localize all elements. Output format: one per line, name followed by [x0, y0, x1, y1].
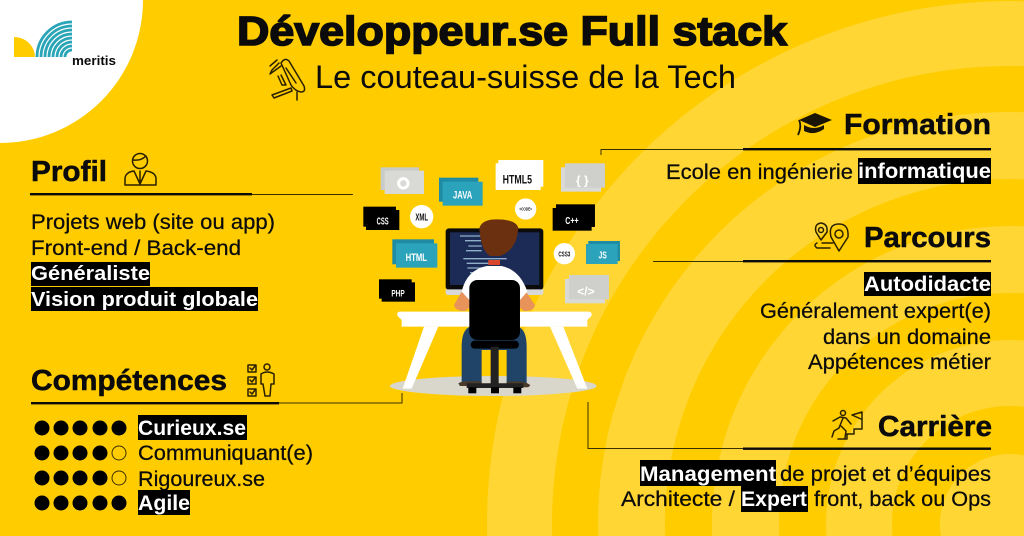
- floor shadow: [390, 376, 597, 396]
- list: parcours: [760, 272, 991, 374]
- list: profil: Vision produit globale: [31, 289, 258, 311]
- list: profil: Front-end / Back-end: [31, 237, 241, 260]
- connector line: [30, 193, 353, 195]
- panel: parcours: [653, 222, 991, 374]
- list: parcours: Appétences métier: [808, 351, 991, 374]
- text: carriere: de projet et d’équipes: [780, 463, 991, 486]
- code cards: CSS: [377, 216, 389, 227]
- list: profil: [31, 211, 275, 311]
- icon: climbing stairs: [832, 410, 862, 439]
- code cards: <CODE>: [519, 207, 532, 212]
- heading: Compétences: Compétences: [31, 365, 227, 397]
- list: parcours: dans un domaine: [823, 326, 991, 349]
- logo: meritis: meritis: [72, 53, 116, 68]
- title: Développeur.se Full stack: [237, 8, 787, 54]
- panel: formation: [601, 109, 991, 184]
- logo: meritis: [0, 0, 143, 143]
- panel: carriere: [588, 402, 992, 512]
- panel: profil: [30, 154, 353, 311]
- desk: [397, 312, 592, 389]
- text: ecole: informatique: [858, 160, 991, 183]
- code cards: CSS3: [558, 250, 570, 259]
- code cards: C++: [565, 216, 579, 227]
- rating dots: [34, 420, 126, 510]
- icon: graduation cap: [798, 113, 832, 135]
- text: carriere: Architecte /: [621, 488, 735, 511]
- list: profil: Généraliste: [31, 263, 150, 285]
- icon: person in suit: [125, 154, 156, 185]
- code cards: </>: [577, 284, 595, 298]
- text: carriere: front, back ou Ops: [814, 488, 991, 511]
- heading: Formation: Formation: [844, 109, 991, 141]
- code cards: XML: [415, 213, 428, 224]
- code cards: JS: [598, 251, 607, 262]
- code cards: { }: [576, 174, 589, 188]
- text: carriere: [621, 460, 991, 512]
- subtitle: Le couteau-suisse de la Tech: [315, 59, 736, 95]
- list: competences: [138, 415, 313, 515]
- icon: map pins: [815, 223, 848, 251]
- list: competences: Agile: [138, 492, 190, 515]
- connector line: [588, 402, 991, 450]
- connector line: [653, 260, 991, 262]
- list: competences: Communiquant(e): [138, 442, 313, 465]
- text: carriere: Expert: [741, 488, 807, 511]
- code cards: HTML5: [503, 172, 532, 186]
- connector line: [31, 393, 402, 404]
- list: competences: Rigoureux.se: [138, 468, 265, 491]
- developer: [454, 219, 535, 387]
- heading: Parcours: Parcours: [864, 222, 991, 254]
- connector line: [601, 148, 991, 155]
- heading: Profil: Profil: [31, 156, 107, 188]
- code cards: [363, 160, 620, 303]
- heading: Carrière: Carrière: [878, 411, 992, 443]
- list: profil: Projets web (site ou app): [31, 211, 275, 234]
- list: parcours: Généralement expert(e): [760, 300, 991, 323]
- text: carriere: Management: [640, 463, 776, 486]
- text: ecole: [666, 158, 991, 184]
- text: ecole: Ecole en ingénierie: [666, 161, 853, 184]
- icon: checklist and person: [248, 364, 274, 396]
- office chair: [467, 280, 523, 393]
- code cards: PHP: [391, 288, 405, 298]
- code cards: JAVA: [453, 189, 473, 201]
- code cards: HTML: [406, 252, 427, 264]
- list: parcours: Autodidacte: [864, 273, 991, 296]
- monitor: [446, 228, 543, 295]
- list: competences: Curieux.se: [138, 417, 246, 440]
- icon: swiss army knife: [270, 59, 305, 100]
- panel: competences: [31, 364, 402, 515]
- illustration: developer at desk: [363, 160, 620, 396]
